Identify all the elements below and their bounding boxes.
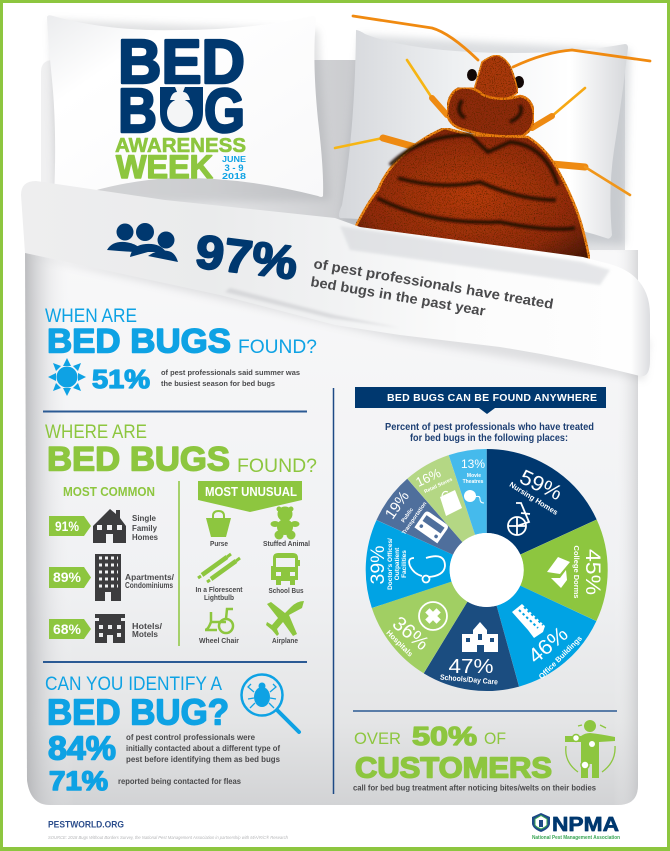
section: over 50% of customers xyxy=(353,720,615,792)
bed fold sheet xyxy=(21,181,650,380)
84% figure: 84% xyxy=(48,730,116,766)
unusual: school bus: School Bus xyxy=(268,586,304,595)
common: single family homes: Family xyxy=(132,524,158,533)
unusual: stuffed animal: Stuffed Animal xyxy=(263,539,310,548)
51% figure: 51% xyxy=(92,364,150,394)
slice: movie theatres xyxy=(461,457,485,503)
heading: 50% xyxy=(412,721,477,751)
icon: sun xyxy=(48,358,86,396)
most unusual banner: MOST UNUSUAL xyxy=(205,484,297,499)
97% description: bed bugs in the past year xyxy=(309,273,487,319)
heading: WHERE ARE xyxy=(45,422,147,443)
slice: schools: Schools/Day Care xyxy=(440,672,498,687)
common: apartments xyxy=(49,554,175,601)
logo: NPMA xyxy=(532,813,621,841)
banner: BED BUGS CAN BE FOUND ANYWHERE xyxy=(387,392,597,404)
logo: NPMA: NPMA xyxy=(552,814,619,836)
heading: BED BUGS xyxy=(47,440,230,478)
slice: doctors offices xyxy=(368,538,445,590)
section: where are bed bugs found xyxy=(45,422,317,646)
97% figure: 97% xyxy=(193,224,300,289)
heading: BED BUG? xyxy=(47,692,229,732)
common: single family homes: Single xyxy=(132,514,157,523)
slice: college dorms xyxy=(547,546,604,598)
logo date xyxy=(222,155,247,181)
bug thorax xyxy=(447,88,534,136)
common: single family homes: Homes xyxy=(132,533,159,542)
slice: doctors offices: 39% xyxy=(368,545,389,584)
common: hotels xyxy=(49,614,163,643)
donut chart xyxy=(368,457,604,687)
logo: Bed Bug Awareness Week: WEEK xyxy=(116,149,213,185)
left pillow xyxy=(47,15,330,205)
logo: Bed Bug Awareness Week: AWARENESS xyxy=(115,135,246,157)
section: can you identify a bed bug xyxy=(45,674,299,796)
footer: website: PESTWORLD.ORG xyxy=(48,820,124,830)
slice: hospitals: Hospitals xyxy=(385,628,415,658)
unusual: fluorescent lightbulb: Lightbulb xyxy=(204,593,234,602)
logo: Bed Bug Awareness Week: G xyxy=(204,77,245,146)
bug abdomen xyxy=(354,128,590,262)
bug head xyxy=(474,55,518,99)
logo: Bed Bug Awareness Week: B xyxy=(118,77,157,146)
slice: nursing homes xyxy=(508,466,566,535)
slice: hospitals: 36% xyxy=(388,612,433,655)
logo date: 3 - 9 xyxy=(224,163,244,174)
common: apartments: Apartments/ xyxy=(125,573,175,582)
unusual: airplane xyxy=(266,601,304,645)
51% description: the busiest season for bed bugs xyxy=(161,379,275,388)
common: hotels: Hotels/ xyxy=(132,622,163,631)
84% description: initially contacted about a different type of xyxy=(126,744,280,753)
slice: movie theatres: 13% xyxy=(461,457,485,471)
most common heading: MOST COMMON xyxy=(63,484,155,499)
slice: public transportation: Public xyxy=(401,507,415,524)
unusual: fluorescent lightbulb: In a Florescent xyxy=(196,585,243,594)
bug body markings xyxy=(377,100,575,229)
slice: retail stores: 16% xyxy=(413,465,444,490)
97% description: of pest professionals have treated xyxy=(312,255,555,312)
common: apartments: Condominiums xyxy=(125,581,173,590)
banner xyxy=(355,387,606,414)
slice: public transportation xyxy=(382,488,449,543)
heading: BED BUGS xyxy=(47,322,231,360)
slice: college dorms: College Dorms xyxy=(572,546,581,598)
icon: person with bites xyxy=(565,720,615,778)
slice: office buildings xyxy=(512,604,584,681)
51% description xyxy=(161,368,300,388)
slice: doctors offices: Outpatient xyxy=(394,547,401,580)
section: when are bed bugs found xyxy=(45,306,317,396)
71% description: reported being contacted for fleas xyxy=(118,777,242,786)
logo date: 2018 xyxy=(222,172,247,181)
logo date: JUNE xyxy=(222,155,247,164)
heading: WHEN ARE xyxy=(45,306,137,327)
icon: people xyxy=(107,223,178,262)
common: single family homes: 91% xyxy=(55,519,79,534)
slice: doctors offices: Doctor's Offices/ xyxy=(387,538,394,590)
logo: NPMA: National Pest Management Association xyxy=(532,835,621,841)
common: single family homes xyxy=(49,509,159,543)
most unusual banner xyxy=(198,481,302,512)
bed bug photo illustration xyxy=(335,16,650,262)
heading xyxy=(45,674,229,732)
heading: OF xyxy=(484,729,506,748)
unusual: school bus xyxy=(268,553,304,595)
slice: hospitals xyxy=(385,602,447,658)
84% description: of pest control professionals were xyxy=(126,733,256,742)
slice: office buildings: Office Buildings xyxy=(537,634,584,681)
footer: source: SOURCE: 2018 Bugs Without Borders Survey, the National Pest Management Association in partnership with M/A/R/C® Research xyxy=(48,834,288,840)
heading: FOUND? xyxy=(238,337,317,358)
heading xyxy=(45,422,317,478)
slice: schools xyxy=(440,622,498,687)
heading: CUSTOMERS xyxy=(355,752,552,784)
slice: schools: 47% xyxy=(448,656,494,678)
slice: public transportation: Transportation xyxy=(401,501,429,536)
unusual: wheel chair xyxy=(199,609,239,645)
heading xyxy=(354,721,552,784)
common: hotels: 68% xyxy=(53,622,81,637)
unusual: stuffed animal xyxy=(263,506,310,548)
slice: doctors offices: Facilities xyxy=(401,550,408,578)
slice: movie theatres: Movie xyxy=(467,473,481,479)
bug legs and antennae xyxy=(335,16,650,195)
logo: Bed Bug Awareness Week xyxy=(115,28,247,185)
common: hotels: Motels xyxy=(132,630,159,639)
slice: nursing homes: Nursing Homes xyxy=(508,480,560,517)
subheading: for bed bugs in the following places: xyxy=(410,433,568,444)
slice: office buildings: 46% xyxy=(524,622,573,668)
U with bug silhouette xyxy=(160,87,203,133)
stat: 97% xyxy=(107,223,555,319)
slice: retail stores: Retail Stores xyxy=(423,477,454,495)
unusual: purse xyxy=(206,511,231,548)
slice: college dorms: 45% xyxy=(581,549,604,595)
heading xyxy=(45,306,317,360)
description: call for bed bug treatment after noticing bites/welts on their bodies xyxy=(353,784,597,792)
subheading xyxy=(385,422,594,444)
bed body sheet xyxy=(25,250,638,805)
84% description xyxy=(126,733,281,764)
section: bed bugs can be found anywhere xyxy=(355,387,606,687)
unusual: purse: Purse xyxy=(210,539,228,548)
heading: CAN YOU IDENTIFY A xyxy=(45,674,222,695)
slice: public transportation: 19% xyxy=(382,488,413,522)
unusual: airplane: Airplane xyxy=(272,636,298,645)
mattress backing xyxy=(41,60,625,290)
subheading: Percent of pest professionals who have treated xyxy=(385,422,594,433)
51% description: of pest professionals said summer was xyxy=(161,368,300,377)
heading: OVER xyxy=(354,729,401,748)
unusual: wheel chair: Wheel Chair xyxy=(199,636,239,645)
71% figure: 71% xyxy=(49,766,108,796)
right pillow xyxy=(339,30,630,245)
icon: magnifying glass with bug xyxy=(242,674,299,732)
bug eyes xyxy=(467,69,524,88)
heading: FOUND? xyxy=(237,456,317,477)
slice: nursing homes: 59% xyxy=(516,466,566,505)
slice: retail stores xyxy=(413,465,462,516)
84% description: pest before identifying them as bed bugs xyxy=(126,755,281,764)
unusual: fluorescent lightbulb xyxy=(196,554,243,602)
slice: movie theatres: Theatres xyxy=(463,479,484,485)
common: apartments: 89% xyxy=(53,570,81,585)
logo: Bed Bug Awareness Week: BED xyxy=(118,28,245,97)
